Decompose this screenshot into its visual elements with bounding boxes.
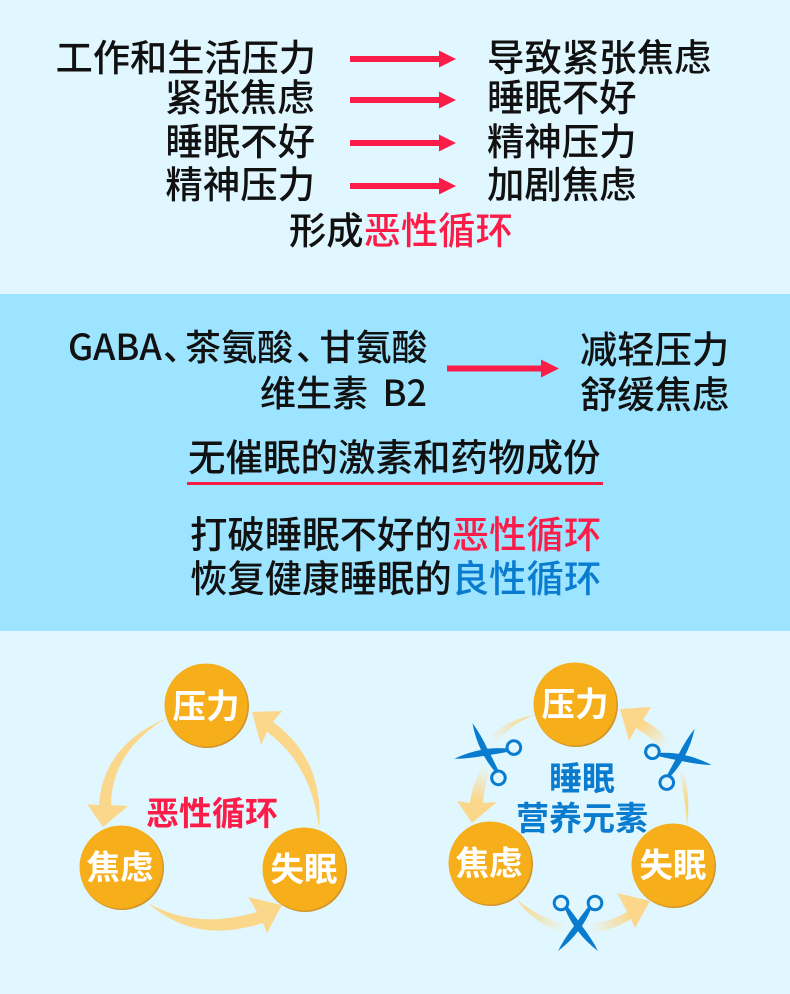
node: insomnia [262, 828, 347, 912]
heading: no hormones or drugs: 无催眠的激素和药物成份 [188, 437, 600, 479]
arrows: red arrows [350, 50, 456, 194]
label: vicious circle: 恶性循环 [146, 795, 278, 832]
text: ingredients: 、 [163, 319, 199, 371]
panel: bottom background [0, 631, 790, 994]
text: effects column: 加剧焦虑 [487, 164, 637, 206]
panel: nutrients and benefits [68, 319, 729, 600]
arrow: anxiety to insomnia, broken [517, 893, 650, 934]
node: anxiety: 焦虑 [456, 846, 522, 883]
label: sleep nutrients: 睡眠 [549, 760, 615, 797]
text: ingredients: 茶氨酸 [185, 319, 293, 371]
text: causes column: 紧张焦虑 [165, 77, 314, 119]
text: benefits [580, 329, 729, 416]
node: pressure: 压力 [542, 687, 608, 724]
node: pressure [164, 664, 249, 748]
node: pressure: 压力 [172, 689, 240, 726]
label: sleep nutrients: 营养元素 [516, 800, 648, 837]
icon: scissors bottom [554, 896, 602, 951]
text: benefits: 舒缓焦虑 [580, 374, 729, 416]
text: causes column: 精神压力 [165, 164, 315, 206]
text: effects column: 精神压力 [487, 121, 637, 163]
underline [187, 482, 603, 485]
panel: vicious circle text flow [56, 37, 711, 252]
chart: cycle broken by sleep nutrients [448, 662, 716, 951]
text: causes column [56, 37, 316, 206]
text: causes column: 工作和生活压力 [56, 37, 316, 79]
arrow: insomnia to pressure [252, 711, 320, 829]
label: sleep nutrients [516, 760, 648, 837]
arrow: insomnia to pressure, broken [620, 707, 688, 825]
text: effects column: 导致紧张焦虑 [487, 37, 711, 79]
node: anxiety: 焦虑 [86, 850, 154, 887]
node: insomnia: 失眠 [640, 848, 706, 885]
text: ingredients: 维生素 [260, 365, 368, 417]
arrow: pressure to anxiety [87, 718, 167, 827]
text: effects column [487, 37, 711, 206]
text: ingredients: 、 [296, 319, 332, 371]
node: insomnia [632, 824, 716, 908]
text: effects column: 睡眠不好 [487, 77, 637, 119]
text: ingredients: B2 [382, 365, 427, 417]
text: benefits: 减轻压力 [580, 329, 729, 371]
panel: top background [0, 0, 790, 294]
chart: vicious cycle diagram [80, 664, 347, 933]
text: ingredients [68, 319, 428, 417]
text: restore the good circle: 恢复健康睡眠的良性循环 [190, 558, 601, 600]
arrow: pressure to anxiety, broken [457, 715, 535, 823]
icon: scissors right [643, 725, 713, 792]
panel: middle background [0, 294, 790, 631]
text: ingredients: GABA [68, 319, 162, 371]
text: causes column: 睡眠不好 [165, 121, 315, 163]
arrow: anxiety to insomnia [148, 897, 282, 933]
text: ingredients: 甘氨酸 [319, 319, 428, 371]
node: pressure [534, 662, 618, 747]
arrow: ingredients to benefits [447, 360, 559, 378]
text: break the vicious circle: 打破睡眠不好的恶性循环 [190, 514, 601, 556]
node: anxiety [80, 826, 164, 910]
text: forms vicious circle: 形成恶性循环 [289, 210, 513, 252]
icon: scissors left [453, 720, 523, 787]
node: insomnia: 失眠 [270, 852, 338, 889]
node: anxiety [448, 822, 533, 906]
